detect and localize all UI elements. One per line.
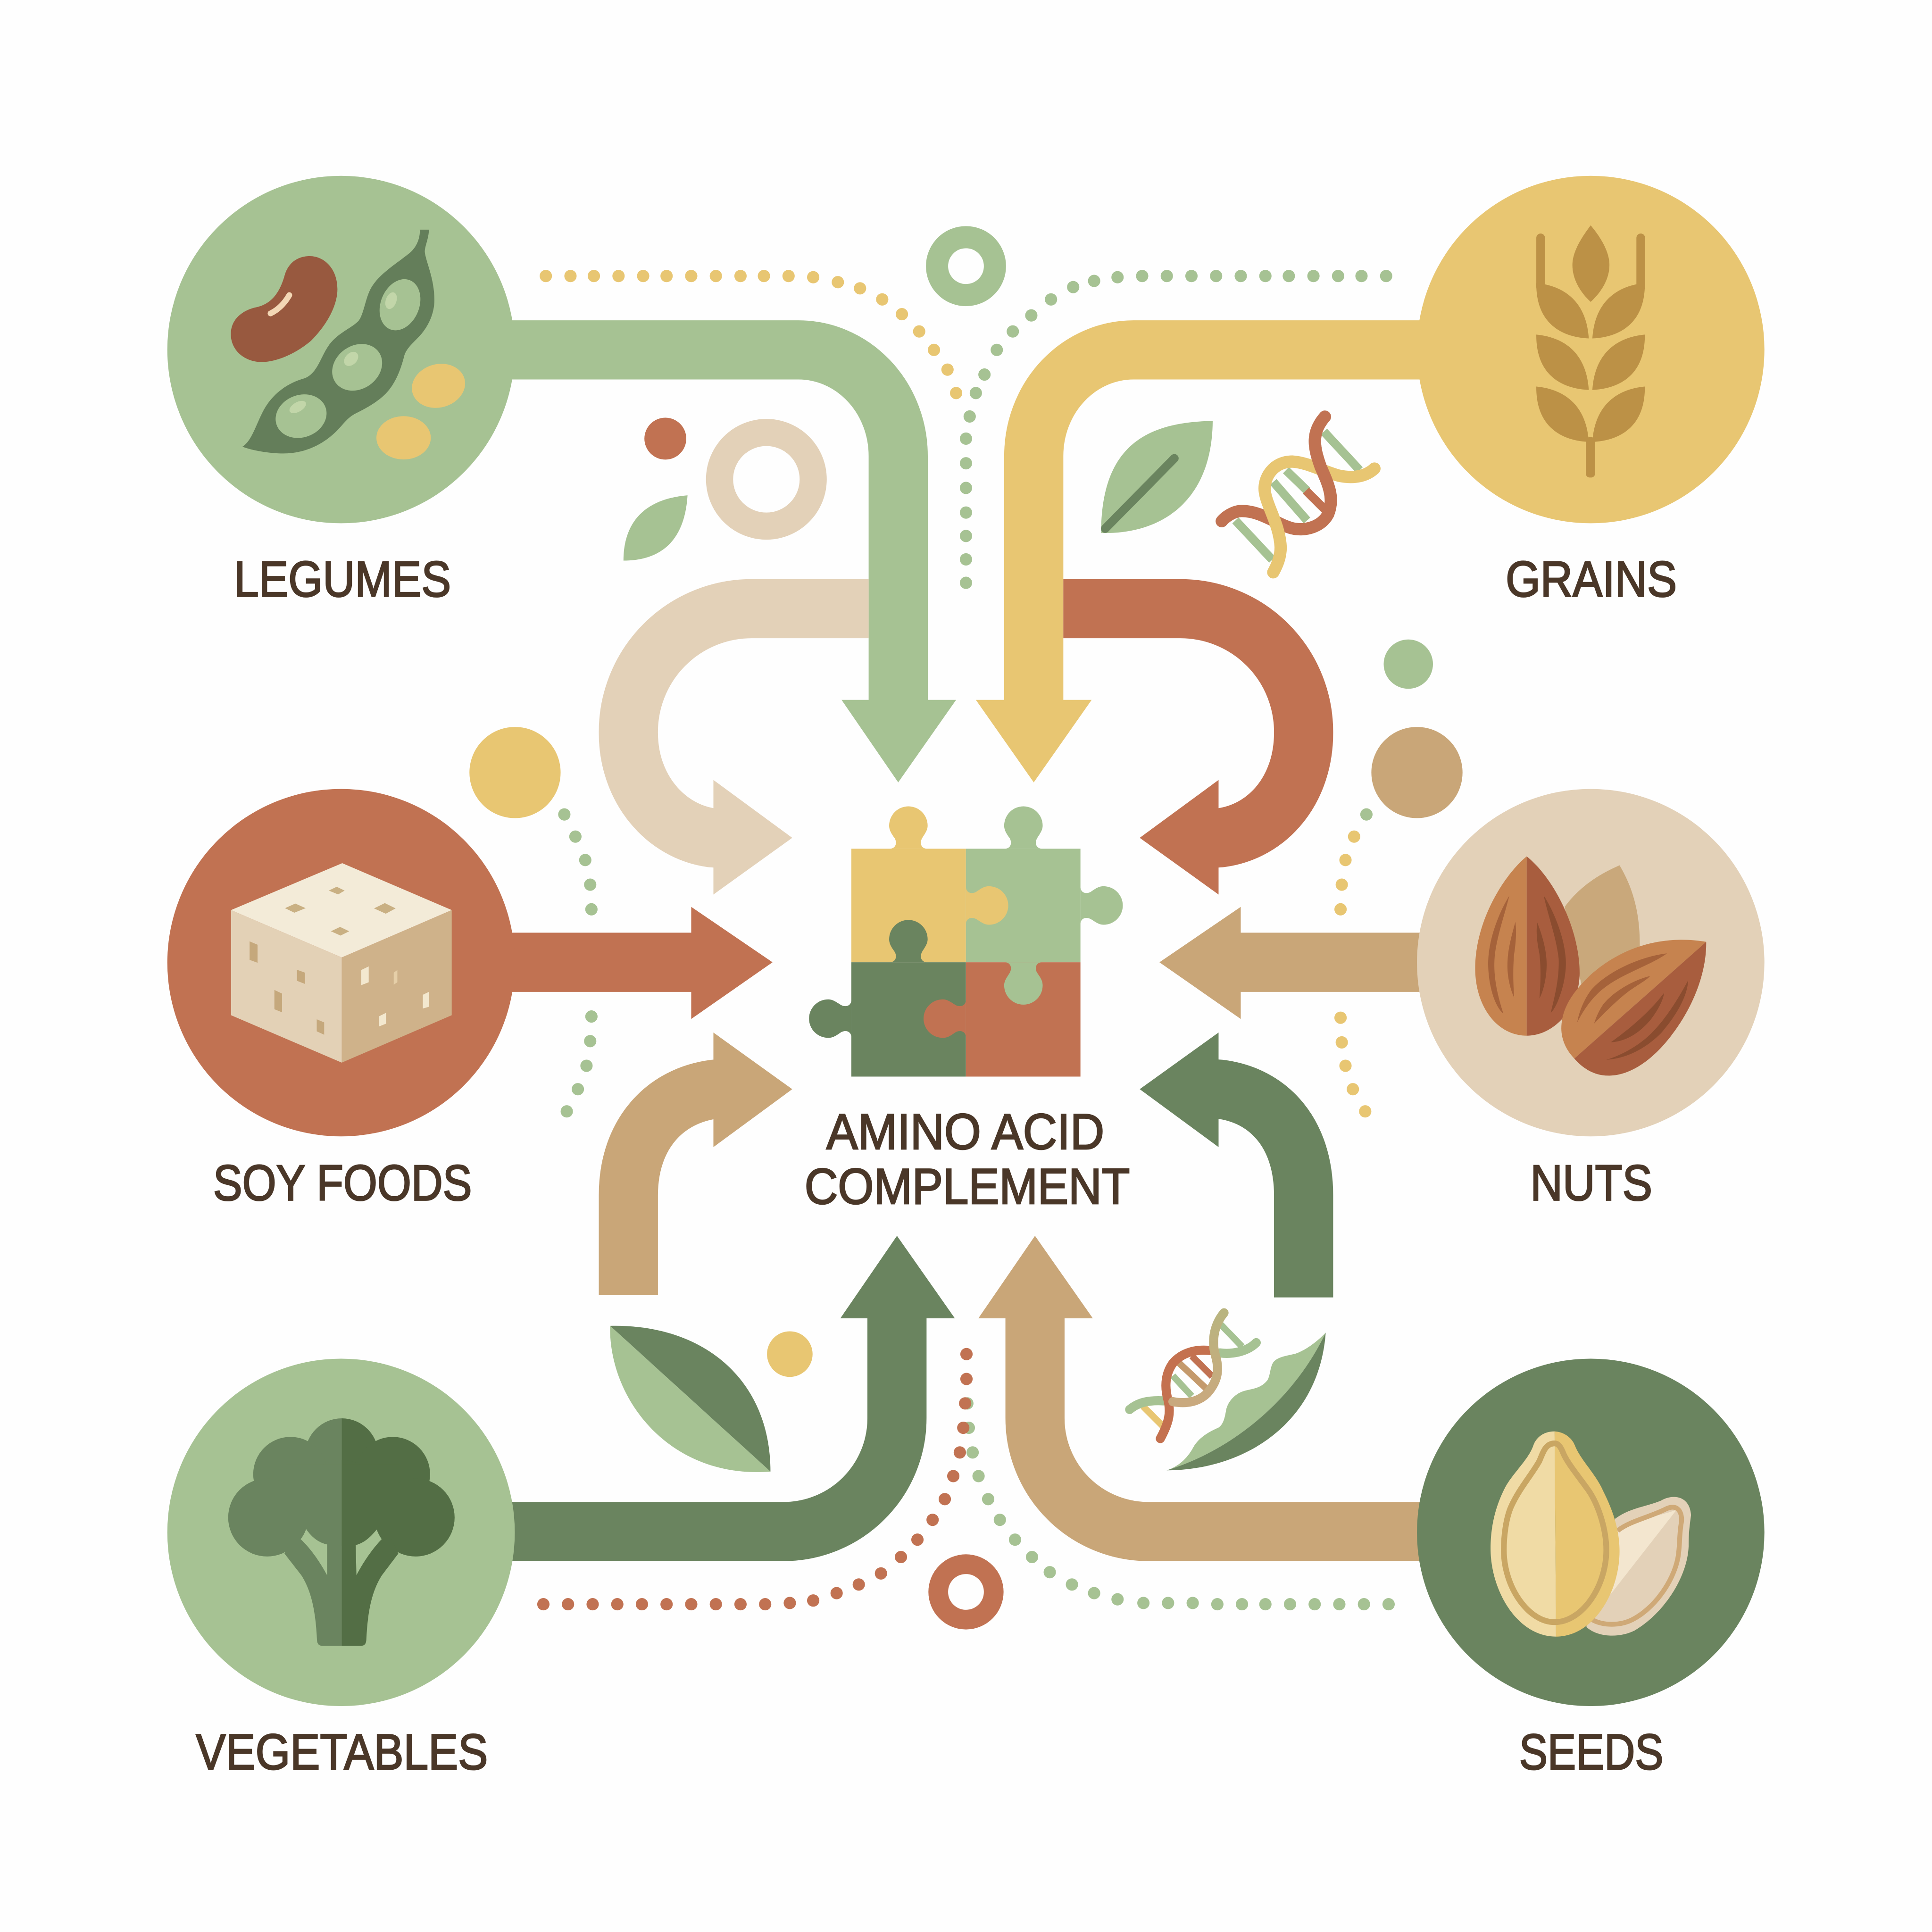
heading: amino acid complement	[805, 1103, 1130, 1215]
dotted path: bottom left and centre column	[537, 1348, 973, 1610]
dotted path: right upper	[1334, 808, 1373, 916]
label: seeds: SEEDS	[1519, 1724, 1663, 1780]
icon: leaf top right	[1101, 421, 1213, 533]
panel: soy foods	[167, 789, 515, 1136]
dotted path: left lower	[561, 1010, 598, 1117]
heading: amino acid complement: COMPLEMENT	[805, 1158, 1130, 1215]
heading: amino acid complement: AMINO ACID	[826, 1103, 1104, 1160]
icon: wheat	[1536, 225, 1645, 477]
dotted path: top right and centre column	[960, 270, 1392, 589]
panel: grains	[1417, 176, 1765, 523]
arrow: vegetables to centre	[505, 1236, 955, 1532]
panel: legumes	[167, 176, 515, 523]
arrow: soy foods to centre	[505, 907, 773, 1019]
icon: broccoli	[228, 1418, 455, 1646]
dotted path: bottom right	[961, 1397, 1395, 1610]
dot: green right	[1384, 640, 1433, 689]
dotted path: left upper	[558, 808, 598, 916]
arrow: seeds to centre	[978, 1236, 1423, 1532]
panel: seeds	[1417, 1358, 1765, 1706]
arrow: dark green curved lower right	[1140, 1033, 1304, 1298]
icon: beans and pod	[231, 230, 470, 459]
label: nuts: NUTS	[1530, 1154, 1652, 1211]
icon: small leaf	[624, 495, 688, 561]
icon: leaf bottom right	[1166, 1332, 1326, 1470]
dot: yellow bottom	[767, 1331, 813, 1377]
icon: pumpkin seeds	[1491, 1432, 1691, 1637]
ring: bottom red	[938, 1564, 994, 1620]
arrow: nuts to centre	[1159, 907, 1423, 1019]
dotted path: right lower	[1334, 1012, 1371, 1117]
label: grains: GRAINS	[1506, 550, 1677, 607]
label: soy foods: SOY FOODS	[213, 1154, 472, 1211]
dot: tan right	[1371, 727, 1463, 818]
panel: vegetables	[167, 1358, 515, 1706]
icon: DNA helix top	[1222, 416, 1374, 572]
ring: beige	[720, 433, 813, 526]
icon: almonds	[1475, 857, 1706, 1075]
dot: red	[644, 418, 686, 459]
icon: tofu cube	[231, 863, 452, 1063]
arrow: red curved	[1063, 608, 1304, 894]
arrow: beige curved	[628, 608, 869, 894]
arrow: grains to centre	[976, 350, 1423, 783]
label: vegetables: VEGETABLES	[196, 1724, 488, 1780]
dotted path: top left	[540, 270, 962, 399]
arrow: tan curved lower left	[628, 1033, 792, 1295]
panel: nuts	[1417, 789, 1765, 1136]
arrow: legumes to centre	[505, 350, 956, 783]
ring: top green	[937, 237, 995, 295]
dot: yellow left	[469, 727, 561, 818]
label: legumes: LEGUMES	[234, 550, 451, 607]
icon: large leaf bottom left	[610, 1326, 770, 1472]
icon: DNA helix bottom	[1130, 1313, 1256, 1439]
icon: central puzzle	[809, 807, 1123, 1076]
